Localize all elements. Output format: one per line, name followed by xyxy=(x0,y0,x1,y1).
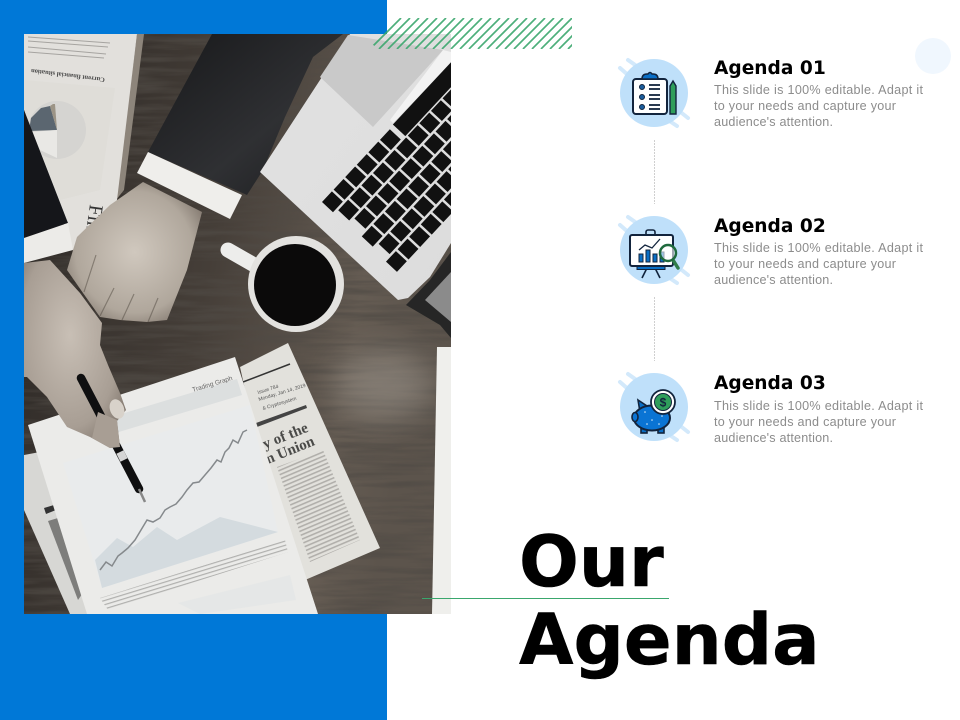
description: audience's attention. xyxy=(714,431,833,445)
newspaper date xyxy=(258,384,306,410)
heading: Agenda 03 xyxy=(714,373,826,394)
newspaper date: & Cryptosystem xyxy=(262,396,297,412)
description: This slide is 100% editable. Adapt it xyxy=(714,83,924,97)
title: Agenda xyxy=(519,599,820,681)
title xyxy=(519,521,820,681)
description: audience's attention. xyxy=(714,115,833,129)
right sleeve xyxy=(148,34,343,195)
connector 1 xyxy=(654,140,656,204)
agenda item 03 xyxy=(620,373,924,445)
trackpad xyxy=(320,35,443,127)
index finger over pen xyxy=(92,412,120,448)
description: This slide is 100% editable. Adapt it xyxy=(714,399,924,413)
pen xyxy=(81,378,145,502)
newspaper date: Issue 784 xyxy=(257,384,280,396)
upside-down Fin heading: Fin xyxy=(81,203,107,233)
coffee mug xyxy=(228,236,344,332)
lower-left under paper xyxy=(24,452,87,614)
newspaper text column xyxy=(277,450,360,562)
description xyxy=(714,399,924,445)
chart area xyxy=(95,429,278,588)
right cuff xyxy=(137,152,242,219)
tablet under laptop xyxy=(406,252,451,338)
laptop xyxy=(260,34,451,300)
back newspaper xyxy=(240,343,380,590)
upside-down heading: Current financial situation xyxy=(30,67,105,83)
blue background panel xyxy=(0,0,387,720)
icon: clipboard and pencil xyxy=(620,59,688,127)
description xyxy=(714,83,924,129)
centre hand xyxy=(67,182,202,322)
newspaper headline: y of the xyxy=(261,420,311,453)
description: This slide is 100% editable. Adapt it xyxy=(714,241,924,255)
description: to your needs and capture your xyxy=(714,99,896,113)
agenda item 01 xyxy=(620,58,924,129)
connector 2 xyxy=(654,297,656,361)
left sleeve and cuff xyxy=(24,110,73,263)
wood desk xyxy=(24,34,451,614)
trading graph label: Trading Graph xyxy=(192,375,234,394)
heading: Agenda 02 xyxy=(714,216,826,237)
keyboard xyxy=(322,62,451,272)
agenda item 02 xyxy=(620,216,924,287)
newspaper date: Monday, Jan 14, 2019 xyxy=(258,383,307,403)
green hatch decoration xyxy=(373,18,572,49)
paper text lines xyxy=(100,540,288,610)
icon: piggy bank with coin: $ xyxy=(660,396,667,410)
right-edge paper xyxy=(432,347,451,614)
title: Our xyxy=(519,521,664,603)
newspaper headline xyxy=(262,426,316,464)
hand holding pen xyxy=(24,260,145,502)
description xyxy=(714,241,924,287)
pie chart xyxy=(28,101,86,159)
front trading graph paper xyxy=(28,357,318,614)
faint decorative circle top right xyxy=(915,38,951,74)
heading: Agenda 01 xyxy=(714,58,826,79)
description: to your needs and capture your xyxy=(714,415,896,429)
icon: piggy bank with coin xyxy=(620,373,688,441)
description: audience's attention. xyxy=(714,273,833,287)
top-left financial report xyxy=(24,34,144,250)
newspaper headline: n Union xyxy=(264,433,318,468)
icon: presentation board with magnifier xyxy=(620,216,688,284)
green title rule xyxy=(422,598,669,600)
photo: desk with documents, laptop and coffee xyxy=(24,34,451,614)
description: to your needs and capture your xyxy=(714,257,896,271)
